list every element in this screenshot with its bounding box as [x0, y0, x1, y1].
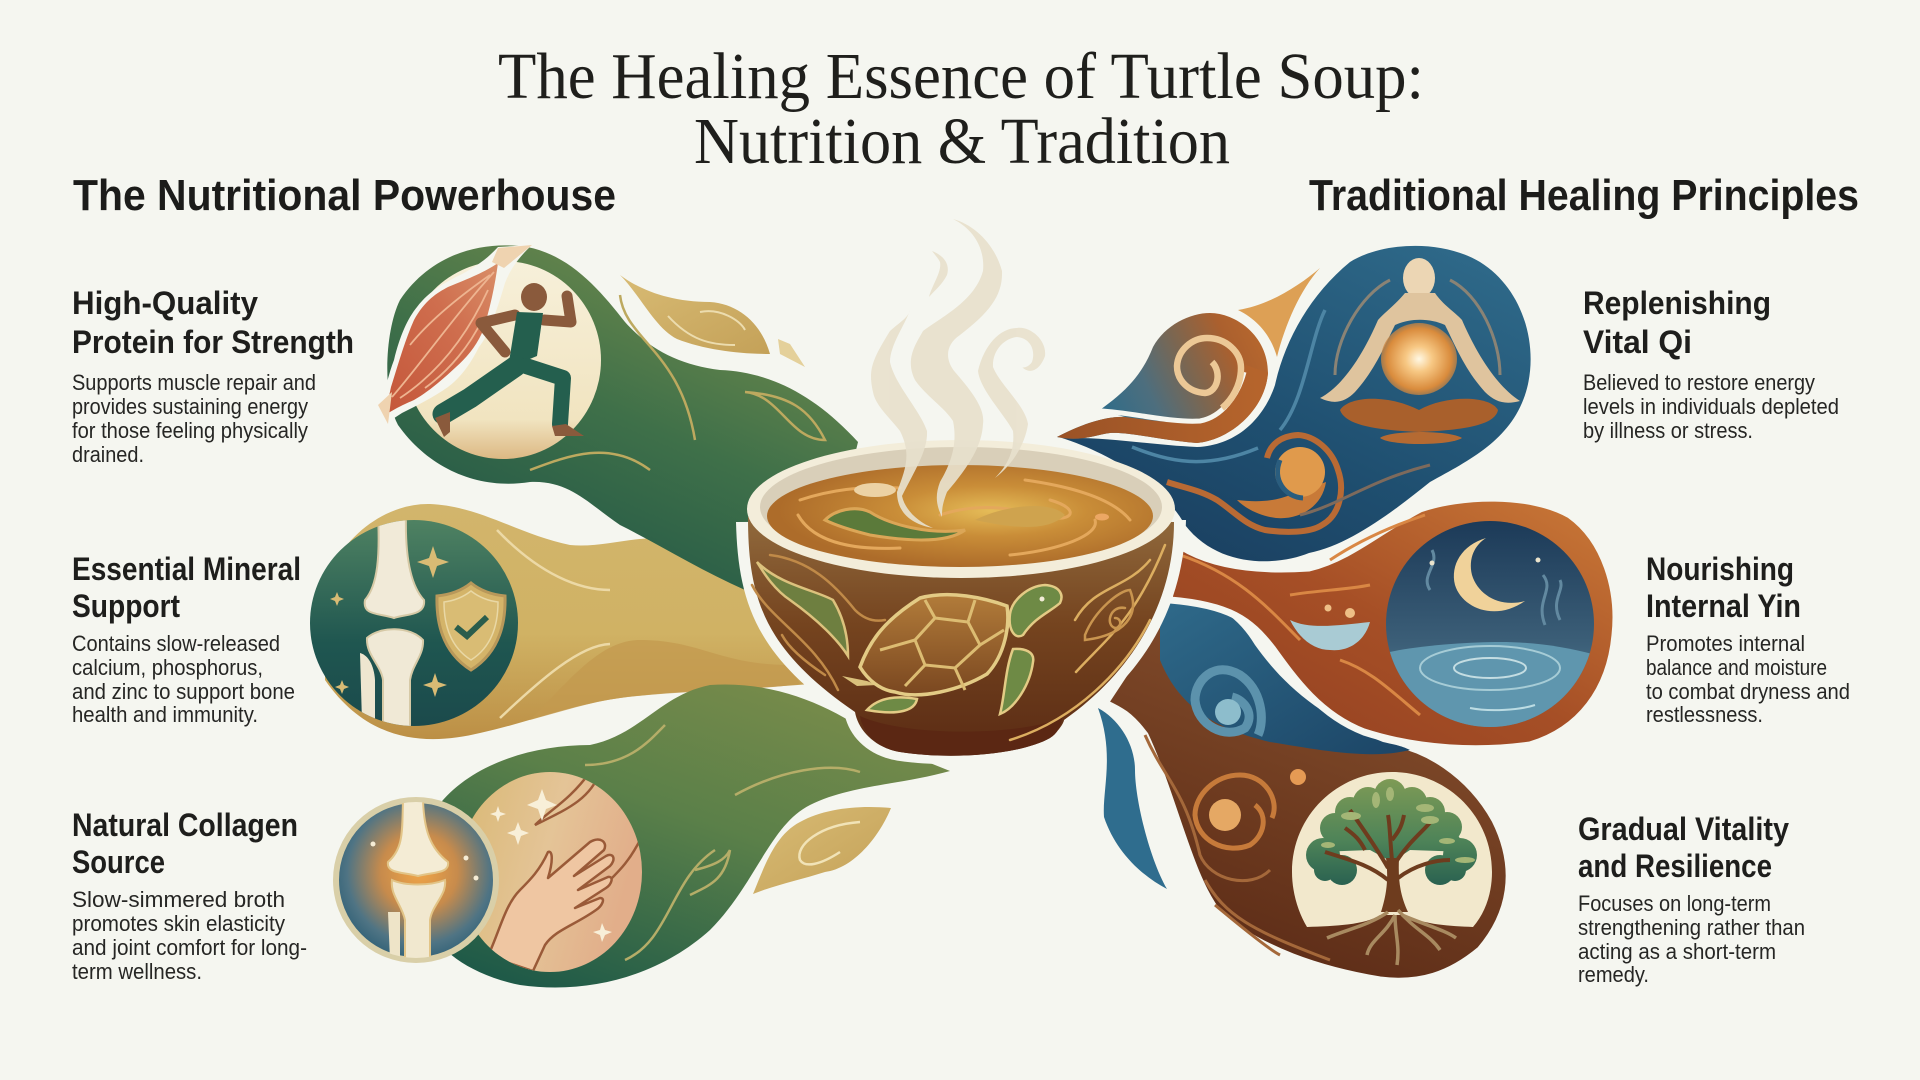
bowl carved pattern	[752, 545, 1165, 740]
leaf: gold lower	[753, 807, 891, 894]
text block: minerals: Support	[72, 588, 180, 624]
text block: internal yin: Nourishing	[1646, 551, 1794, 587]
text block: internal yin: balance and moisture	[1646, 655, 1827, 680]
text block: minerals: and zinc to support bone	[72, 679, 295, 704]
panel: nutritional powerhouse illustration	[310, 245, 950, 988]
leaf: blue	[1098, 708, 1167, 889]
icon: meditating figure	[1320, 258, 1520, 444]
text block: protein	[72, 285, 354, 467]
text block: vitality: Focuses on long-term	[1578, 891, 1771, 916]
text block: vital qi: by illness or stress.	[1583, 418, 1753, 443]
text block: protein: provides sustaining energy	[72, 394, 308, 419]
text block: protein: Supports muscle repair and	[72, 370, 316, 395]
text block: collagen: promotes skin elasticity	[72, 911, 285, 936]
text block: vitality: Gradual Vitality	[1578, 811, 1789, 847]
text block: minerals	[72, 551, 301, 727]
bowl body	[736, 517, 1186, 764]
flow: protein green	[387, 245, 858, 640]
icon: shield	[437, 583, 505, 670]
icon: tree	[1306, 779, 1477, 965]
text block: vitality: acting as a short-term	[1578, 939, 1776, 964]
flow: vitality brown and blue	[1105, 598, 1509, 981]
text block: collagen: Source	[72, 844, 165, 880]
text block: internal yin: Promotes internal	[1646, 631, 1805, 656]
swirl: brown teardrop and band	[1057, 313, 1268, 443]
text block: minerals: Contains slow-released	[72, 631, 280, 656]
icon: muscle	[377, 245, 532, 424]
text block: internal yin: restlessness.	[1646, 702, 1763, 727]
section heading: healing principles: Traditional Healing Principles	[1309, 171, 1859, 220]
text block: protein: drained.	[72, 442, 144, 467]
spiral: amber	[1195, 769, 1306, 848]
text block: minerals: calcium, phosphorus,	[72, 655, 263, 680]
text block: vital qi: Believed to restore energy	[1583, 370, 1815, 395]
icon: moon over water circle	[1385, 521, 1600, 730]
flow: mineral support gold	[325, 504, 810, 739]
bowl rim	[747, 440, 1175, 578]
text block: protein: for those feeling physically	[72, 418, 308, 443]
text block: collagen	[72, 807, 307, 984]
leaf: gold upper	[620, 275, 805, 367]
icon: runner circle	[377, 245, 601, 459]
title	[498, 40, 1424, 178]
panel: traditional healing illustration	[1057, 246, 1616, 981]
text block: minerals: health and immunity.	[72, 702, 258, 727]
bowl of soup	[736, 219, 1186, 764]
text block: collagen: Slow-simmered broth	[72, 887, 285, 912]
text block: minerals: Essential Mineral	[72, 551, 301, 587]
text block: internal yin: Internal Yin	[1646, 588, 1801, 624]
title: Nutrition & Tradition	[694, 105, 1230, 178]
spiral: blue wave	[1195, 670, 1261, 735]
text block: collagen: Natural Collagen	[72, 807, 298, 843]
icon: bones	[360, 515, 424, 730]
icon: tree circle	[1292, 772, 1492, 965]
section heading: nutritional powerhouse: The Nutritional Powerhouse	[73, 171, 616, 220]
flow: yin orange	[1160, 498, 1616, 749]
icon: runner figure	[435, 283, 584, 437]
icon: skin and hand circle	[458, 772, 642, 972]
text block: vital qi	[1583, 285, 1839, 443]
soup surface	[767, 465, 1153, 567]
text block: protein: Protein for Strength	[72, 324, 354, 360]
text block: collagen: and joint comfort for long-	[72, 935, 307, 960]
steam	[871, 219, 1045, 528]
turtle	[842, 585, 1061, 714]
text block: internal yin: to combat dryness and	[1646, 679, 1850, 704]
icon: mineral circle	[310, 515, 518, 730]
text block: vitality: strengthening rather than	[1578, 915, 1805, 940]
text block: vitality: remedy.	[1578, 962, 1649, 987]
text block: internal yin	[1646, 551, 1850, 727]
text block: protein: High-Quality	[72, 285, 258, 321]
spiral: qi lower	[1132, 310, 1430, 532]
text block: vital qi: Vital Qi	[1583, 324, 1692, 360]
leaf: orange triangle	[1238, 268, 1320, 357]
flow: collagen green	[430, 684, 950, 988]
text block: vital qi: levels in individuals depleted	[1583, 394, 1839, 419]
title: The Healing Essence of Turtle Soup:	[498, 40, 1424, 113]
text block: vitality: and Resilience	[1578, 848, 1772, 884]
text block: collagen: term wellness.	[72, 959, 202, 984]
flow: qi blue	[1057, 246, 1531, 561]
text block: vitality	[1578, 811, 1805, 987]
icon: water	[1390, 642, 1590, 727]
icon: crescent moon	[1454, 538, 1525, 611]
text block: vital qi: Replenishing	[1583, 285, 1771, 321]
icon: knee circle	[336, 800, 496, 962]
